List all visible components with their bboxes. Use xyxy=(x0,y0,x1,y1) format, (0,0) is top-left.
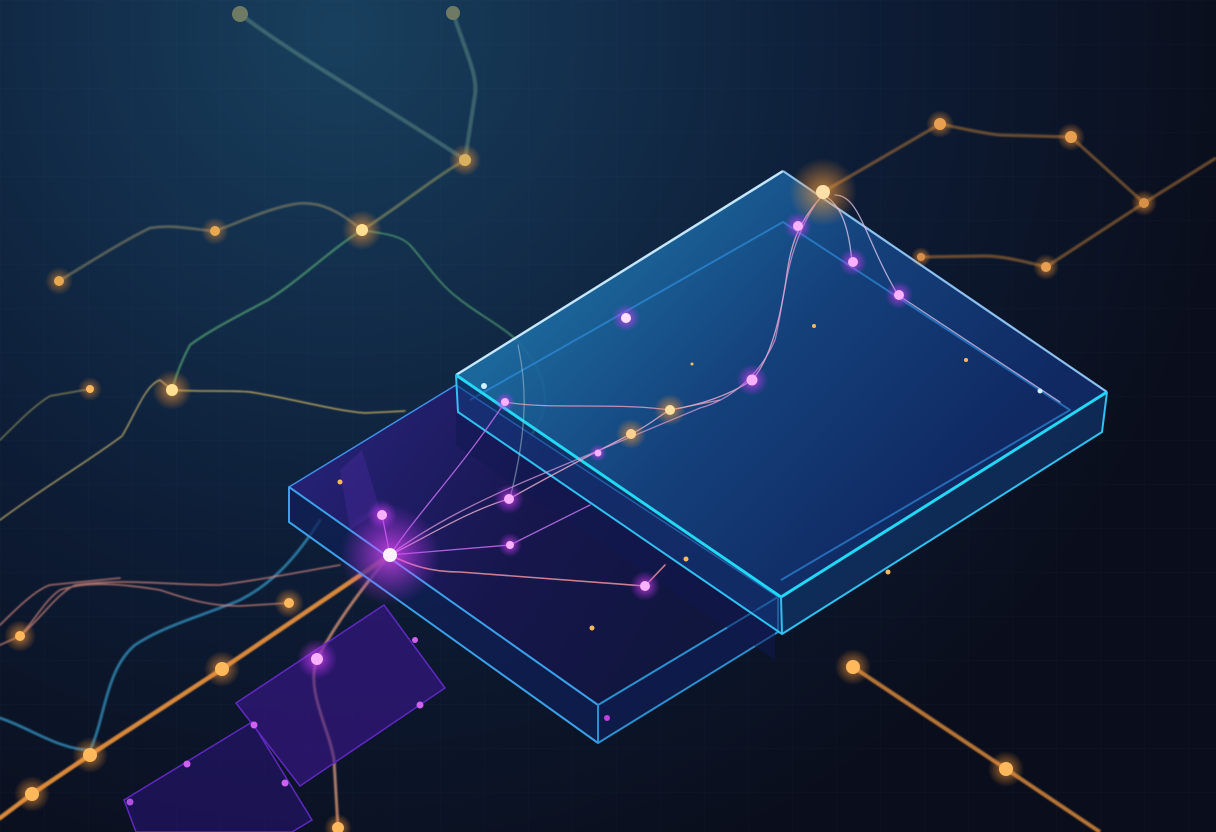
lower slab left side xyxy=(289,487,598,743)
network lines: upper left xyxy=(0,13,545,520)
network line: lower right xyxy=(853,667,1100,832)
upper slab shadow side xyxy=(456,410,775,660)
upper slab top face xyxy=(456,171,1107,597)
lower slab right side xyxy=(598,597,778,743)
upper slab inner rim xyxy=(470,222,1070,580)
upper slab front left side xyxy=(456,375,782,634)
network lines: lower left xyxy=(0,520,390,828)
lower slab top face xyxy=(289,385,778,705)
lower slab xyxy=(289,385,778,743)
purple tiles at lower left xyxy=(124,605,445,832)
upper slab xyxy=(456,171,1107,660)
wires inside slabs xyxy=(382,195,1060,586)
network lines: upper right xyxy=(823,124,1216,267)
upper slab bright edges xyxy=(456,171,1107,634)
nodes: magenta xyxy=(126,221,1042,806)
upper slab front right side xyxy=(781,392,1107,634)
